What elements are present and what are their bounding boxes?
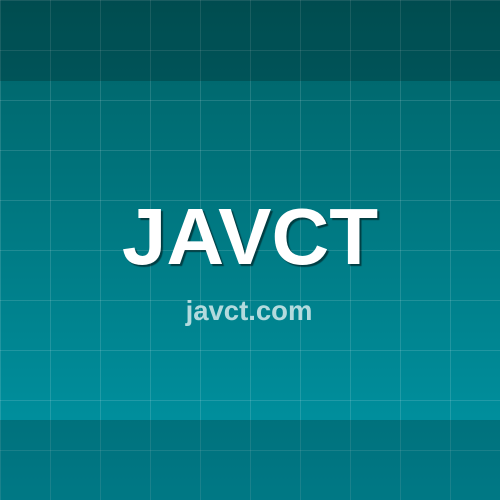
top band <box>0 0 500 81</box>
bottom band <box>0 420 500 500</box>
website address: javct.com <box>186 295 312 326</box>
title: JAVCT <box>122 192 378 281</box>
